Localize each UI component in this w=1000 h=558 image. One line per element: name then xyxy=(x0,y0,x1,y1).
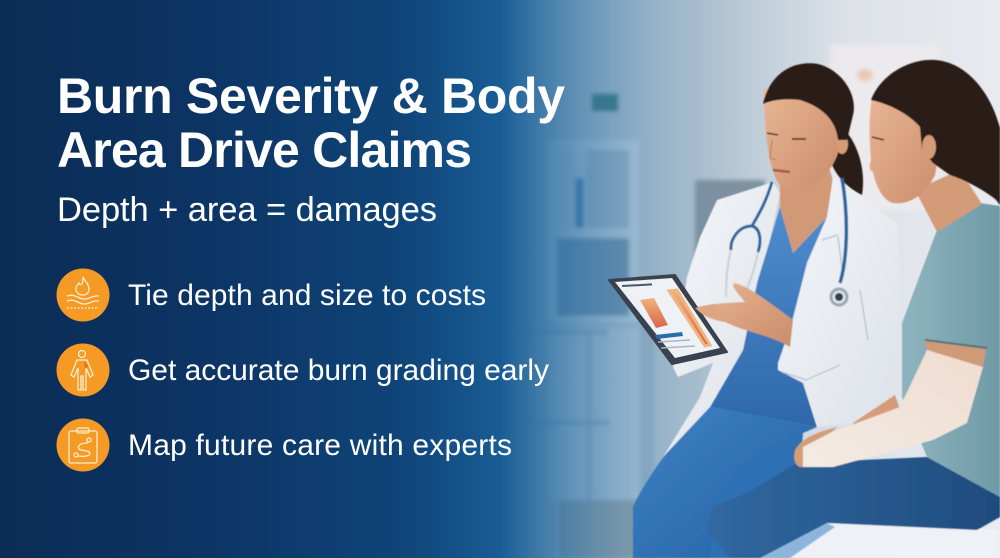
title xyxy=(57,68,565,178)
doctor pointing hand xyxy=(695,283,793,347)
doctor features xyxy=(767,133,806,172)
patient upper arm skin xyxy=(925,341,986,367)
bullet: burn grading xyxy=(56,344,549,396)
illustration: patient xyxy=(707,60,1000,558)
patient fingers xyxy=(794,427,838,467)
subtitle: Depth + area = damages xyxy=(57,191,437,229)
doctor scrubs xyxy=(710,207,827,427)
patient sleeve line xyxy=(925,340,987,348)
patient eye xyxy=(872,137,884,140)
coat lines xyxy=(782,235,868,380)
title: Burn Severity & Body xyxy=(57,68,565,124)
doctor lab coat right xyxy=(778,177,902,427)
doctor lab coat left xyxy=(663,182,780,457)
fingertip over tablet xyxy=(695,304,716,316)
doctor neck xyxy=(780,165,833,253)
patient neck xyxy=(915,170,982,232)
text: Tie depth and size to costs xyxy=(128,279,486,312)
patient hair xyxy=(871,60,1000,203)
patient other hand xyxy=(853,395,902,440)
patient jeans xyxy=(707,457,1000,558)
icon: body figure xyxy=(56,344,110,396)
icon: burn skin layers xyxy=(56,268,110,322)
illustration: doctor xyxy=(633,63,902,558)
illustration: tablet xyxy=(609,275,727,364)
text: Get accurate burn grading early xyxy=(128,354,549,387)
doctor ponytail xyxy=(832,130,863,195)
bullet: map future care xyxy=(56,418,512,472)
bandage xyxy=(802,350,983,467)
patient ear xyxy=(922,135,936,159)
doctor far leg xyxy=(700,433,803,558)
bullet: tie depth and size xyxy=(56,268,486,322)
bed xyxy=(755,523,1000,558)
doctor pants xyxy=(633,407,817,558)
patient face xyxy=(870,90,945,203)
title: Area Drive Claims xyxy=(57,122,472,178)
doctor face xyxy=(764,86,840,191)
icon: clipboard with route xyxy=(56,418,110,472)
text: Map future care with experts xyxy=(128,429,512,462)
doctor hair xyxy=(763,63,854,140)
patient shirt xyxy=(902,203,1000,497)
stethoscope xyxy=(726,178,847,305)
patient ponytail xyxy=(985,128,1000,205)
